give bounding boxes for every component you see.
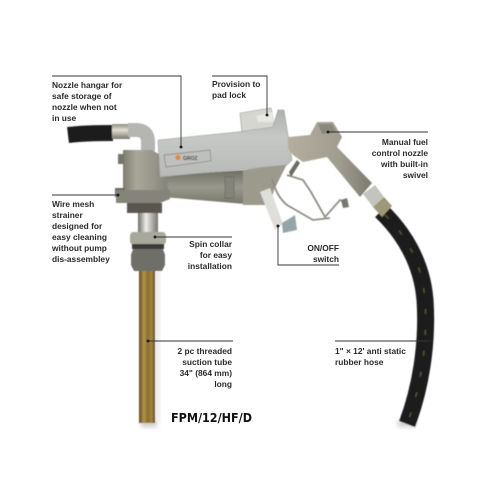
callout: nozzle hangar: Nozzle hangar for xyxy=(52,80,123,90)
callout: suction tube: 2 pc threaded xyxy=(178,346,232,356)
callout: spin collar: installation xyxy=(188,261,232,271)
brand plate xyxy=(164,150,211,167)
brand plate: GROZ xyxy=(183,156,197,162)
drop shadows xyxy=(141,420,157,427)
callout: strainer: dis-assembley xyxy=(52,254,110,264)
inlet hose xyxy=(68,133,113,135)
callout: manual nozzle: Manual fuel xyxy=(382,137,428,147)
callout: rubber hose xyxy=(335,340,432,367)
elbow xyxy=(128,130,148,151)
callout: spin collar: for easy xyxy=(200,250,232,260)
callout: pad lock: Provision to xyxy=(212,79,260,89)
padlock bracket xyxy=(240,108,274,133)
motor flange xyxy=(243,164,287,205)
callout: on/off switch xyxy=(276,224,339,265)
suction tube xyxy=(139,268,155,423)
illustration: fuel pump xyxy=(68,108,426,427)
trigger guard xyxy=(272,175,348,220)
motor label xyxy=(225,177,234,198)
callout: pad lock xyxy=(212,76,268,116)
callout: manual nozzle xyxy=(326,130,428,180)
callout: nozzle hangar: safe storage of xyxy=(52,91,112,101)
hose ferrule xyxy=(112,124,130,139)
callout: strainer: easy cleaning xyxy=(52,232,107,242)
callout: manual nozzle: with built-in xyxy=(380,159,428,169)
callout: manual nozzle: swivel xyxy=(403,170,428,180)
model number: FPM/12/HF/D xyxy=(171,411,252,425)
callout: strainer: without pump xyxy=(51,243,107,253)
callout: pad lock: pad lock xyxy=(212,90,246,100)
callout: suction tube: long xyxy=(214,379,232,389)
spin collar xyxy=(130,212,166,271)
callout: strainer: Wire mesh xyxy=(52,199,94,209)
nozzle xyxy=(288,122,372,208)
pump head xyxy=(123,150,168,192)
callout: manual nozzle: control nozzle xyxy=(372,148,428,158)
callout: nozzle hangar xyxy=(52,76,182,148)
ON/OFF lever xyxy=(260,188,297,233)
callout: on/off switch: ON/OFF xyxy=(307,243,339,253)
callout: strainer xyxy=(51,194,120,264)
callout: on/off switch: switch xyxy=(313,254,339,264)
hose print xyxy=(385,215,426,424)
hose coupling xyxy=(363,185,392,217)
callout: suction tube: suction tube xyxy=(182,357,232,367)
callout: strainer: designed for xyxy=(52,221,103,231)
callout: nozzle hangar: nozzle when not xyxy=(52,102,117,112)
callout: rubber hose: rubber hose xyxy=(335,357,384,367)
callout: suction tube: 34" (864 mm) xyxy=(180,368,232,378)
callout: nozzle hangar: in use xyxy=(52,113,77,123)
callout: rubber hose: 1" × 12' anti static xyxy=(335,346,406,356)
callout: suction tube xyxy=(146,340,233,389)
pump body housing xyxy=(158,110,292,177)
callout: strainer: strainer xyxy=(52,210,83,220)
motor xyxy=(163,170,245,204)
padlock hasp xyxy=(256,112,274,122)
callout: spin collar: Spin collar xyxy=(189,239,233,249)
callout: spin collar xyxy=(154,236,233,271)
outlet hose xyxy=(381,211,426,424)
